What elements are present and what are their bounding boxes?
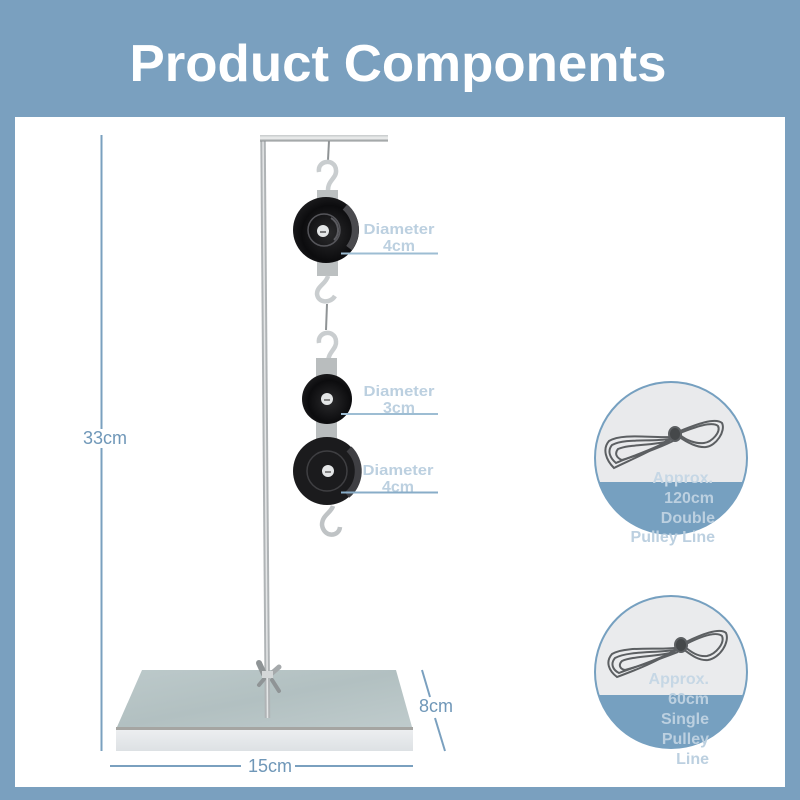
label: bottom diameter: Diameter [362, 462, 434, 479]
label: middle diameter: Diameter [364, 383, 435, 400]
caption: Single [661, 711, 709, 728]
top hook [319, 162, 336, 190]
base plate [116, 670, 413, 751]
stand rod [260, 135, 388, 718]
caption [649, 671, 709, 768]
caption: Pulley [662, 731, 709, 748]
top pulley wheel 4cm [293, 197, 359, 263]
dimension: height 33cm: 33cm [83, 428, 127, 448]
label: middle diameter: 3cm [383, 400, 415, 417]
top pulley bracket [317, 190, 338, 276]
label: top diameter: Diameter [364, 221, 435, 238]
label: middle diameter [341, 383, 438, 417]
caption: Double [661, 510, 715, 527]
lower pulley bracket [316, 358, 337, 458]
dimension: width 15cm: 15cm [248, 756, 292, 776]
icon: rope coil [608, 631, 727, 677]
panel: single pulley line [595, 596, 747, 768]
caption: Pulley Line [631, 529, 715, 546]
top chain [328, 141, 329, 160]
link hooks [317, 276, 336, 362]
bottom hook [322, 506, 340, 535]
caption: Approx. [653, 470, 713, 487]
label: bottom diameter: 4cm [382, 479, 414, 496]
dimension: depth 8cm [419, 670, 453, 751]
caption: Line [676, 751, 709, 768]
caption: Approx. [649, 671, 709, 688]
product: pulley stand [116, 135, 413, 751]
icon: rope coil [605, 421, 723, 468]
label: top diameter [341, 221, 438, 255]
dimension: depth 8cm: 8cm [419, 696, 453, 716]
panel: double pulley line [595, 382, 747, 546]
label: top diameter: 4cm [383, 238, 415, 255]
middle pulley wheel 3cm [302, 374, 352, 424]
caption: 120cm [664, 490, 714, 507]
wing nut [259, 663, 279, 691]
title: Product Components [130, 35, 666, 93]
label: bottom diameter [341, 462, 438, 496]
bottom pulley wheel 4cm [293, 437, 361, 505]
caption [631, 470, 715, 546]
caption: 60cm [668, 691, 709, 708]
